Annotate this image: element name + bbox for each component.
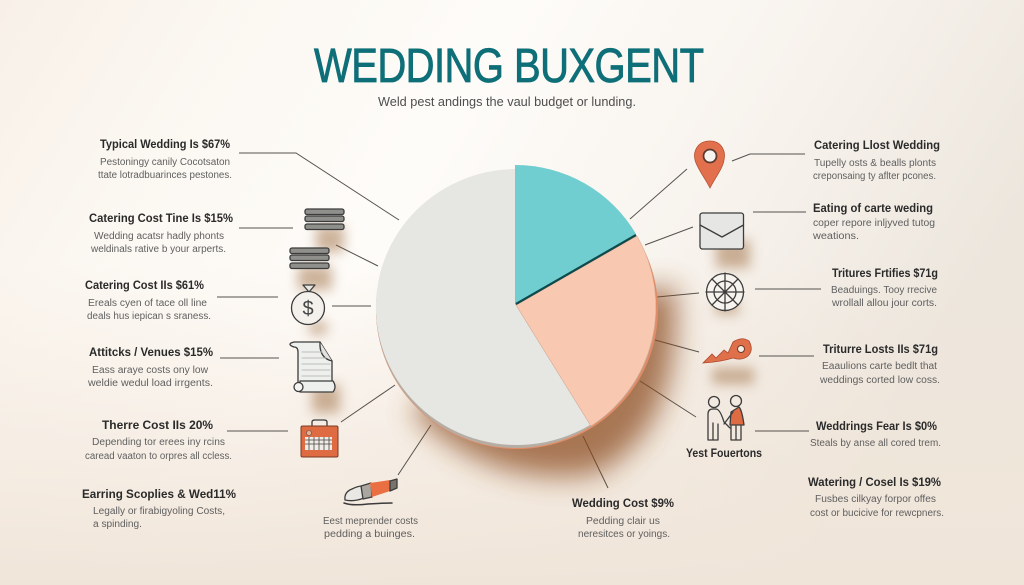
- right label 2: weations.: [812, 231, 859, 242]
- right label 1: [813, 138, 940, 182]
- left label 2: Catering Cost Tine Is $15%: [89, 211, 233, 225]
- icon: calendar briefcase: [301, 420, 338, 457]
- icon: wheel: [706, 273, 744, 311]
- left label 3: Ereals cyen of tace oll line: [88, 298, 207, 309]
- icon: stacked bills 1: [305, 209, 344, 230]
- pie slice: gray: [376, 169, 590, 445]
- left label 4: Attitcks / Venues $15%: [89, 345, 213, 359]
- left label 6: Earring Scoplies & Wed11%: [82, 487, 236, 501]
- left label 4: Eass araye costs ony low: [92, 365, 209, 376]
- icon caption: Yest Fouertons: [686, 446, 762, 460]
- left label 6: Legally or firabigyoling Costs,: [93, 506, 225, 517]
- right label 6: [808, 475, 944, 519]
- icon: lipstick bottle: [344, 479, 397, 505]
- pie chart: [376, 165, 676, 477]
- left label 1: [98, 137, 232, 181]
- icon: couple: [708, 396, 744, 440]
- left label 6: a spinding.: [93, 519, 142, 530]
- pie slice: peach: [516, 236, 656, 426]
- left label 1: ttate lotradbuarinces pestones.: [98, 170, 232, 181]
- right label 4: weddings corted low coss.: [819, 375, 940, 386]
- right label 5: Weddrings Fear Is $0%: [816, 419, 937, 433]
- left label 2: weldinals rative b your arperts.: [90, 244, 226, 255]
- right label 6: Fusbes cilkyay forpor offes: [815, 494, 936, 505]
- bottom label: costs note: Eest meprender costs: [323, 516, 418, 527]
- bottom label: wedding cost: Wedding Cost $9%: [572, 496, 674, 510]
- left label 3: deals hus iepican s sraness.: [87, 311, 211, 322]
- right label 2: [812, 201, 935, 242]
- bottom label: wedding cost: neresitces or yoings.: [578, 529, 670, 540]
- bottom label: wedding cost: Pedding clair us: [586, 516, 660, 527]
- left label 5: Therre Cost IIs 20%: [102, 418, 213, 432]
- pie slice: teal: [515, 165, 636, 304]
- right label 5: Steals by anse all cored trem.: [810, 438, 941, 449]
- right label 6: cost or bucicive for rewcpners.: [810, 508, 944, 519]
- right label 1: Tupelly osts & bealls plonts: [814, 158, 936, 169]
- icon: envelope: [700, 213, 744, 249]
- icon: scroll document: [290, 342, 335, 392]
- subtitle: Weld pest andings the vaul budget or lunding.: [378, 95, 636, 109]
- left label 6: [82, 487, 236, 530]
- left label 5: [85, 418, 232, 462]
- right label 4: [819, 342, 940, 386]
- right label 5: [810, 419, 941, 449]
- connector lines: [217, 153, 821, 488]
- icon: stacked bills 2: [290, 248, 329, 268]
- left label 5: caread vaaton to orpres all ccless.: [85, 451, 232, 462]
- title: WEDDING BUXGENT: [314, 40, 704, 93]
- right label 3: [831, 266, 938, 309]
- icon: money bag: [292, 285, 324, 324]
- bottom label: costs note: [323, 516, 418, 540]
- right label 6: Watering / Cosel Is $19%: [808, 475, 941, 489]
- left label 4: weldie wedul load irrgents.: [87, 378, 213, 389]
- icon: map pin: [695, 141, 724, 188]
- left label 1: Typical Wedding Is $67%: [100, 137, 230, 151]
- icon: key: [703, 339, 751, 363]
- right label 3: Beaduings. Tooy rrecive: [831, 285, 937, 296]
- left label 2: [89, 211, 233, 255]
- right label 1: creponsaing ty aflter pcones.: [813, 171, 936, 182]
- left label 2: Wedding acatsr hadly phonts: [94, 231, 224, 242]
- right label 2: coper repore inljyved tutog: [813, 218, 935, 229]
- right label 3: Tritures Frtifies $71g: [832, 266, 938, 280]
- right label 4: Eaaulions carte bedlt that: [822, 361, 937, 372]
- left label 3: Catering Cost IIs $61%: [85, 278, 204, 292]
- icon: money bag: $: [302, 298, 314, 320]
- bottom label: costs note: pedding a buinges.: [324, 529, 415, 540]
- left label 4: [87, 345, 213, 389]
- bottom label: wedding cost: [572, 496, 674, 540]
- left label 5: Depending tor erees iny rcins: [92, 437, 225, 448]
- left label 3: [85, 278, 211, 322]
- left label 1: Pestoningy canily Cocotsaton: [100, 157, 230, 168]
- right label 3: wrollall allou jour corts.: [831, 298, 937, 309]
- right label 1: Catering Llost Wedding: [814, 138, 940, 152]
- right label 4: Triturre Losts IIs $71g: [823, 342, 938, 356]
- icon shadows: [298, 226, 754, 413]
- right label 2: Eating of carte weding: [813, 201, 933, 215]
